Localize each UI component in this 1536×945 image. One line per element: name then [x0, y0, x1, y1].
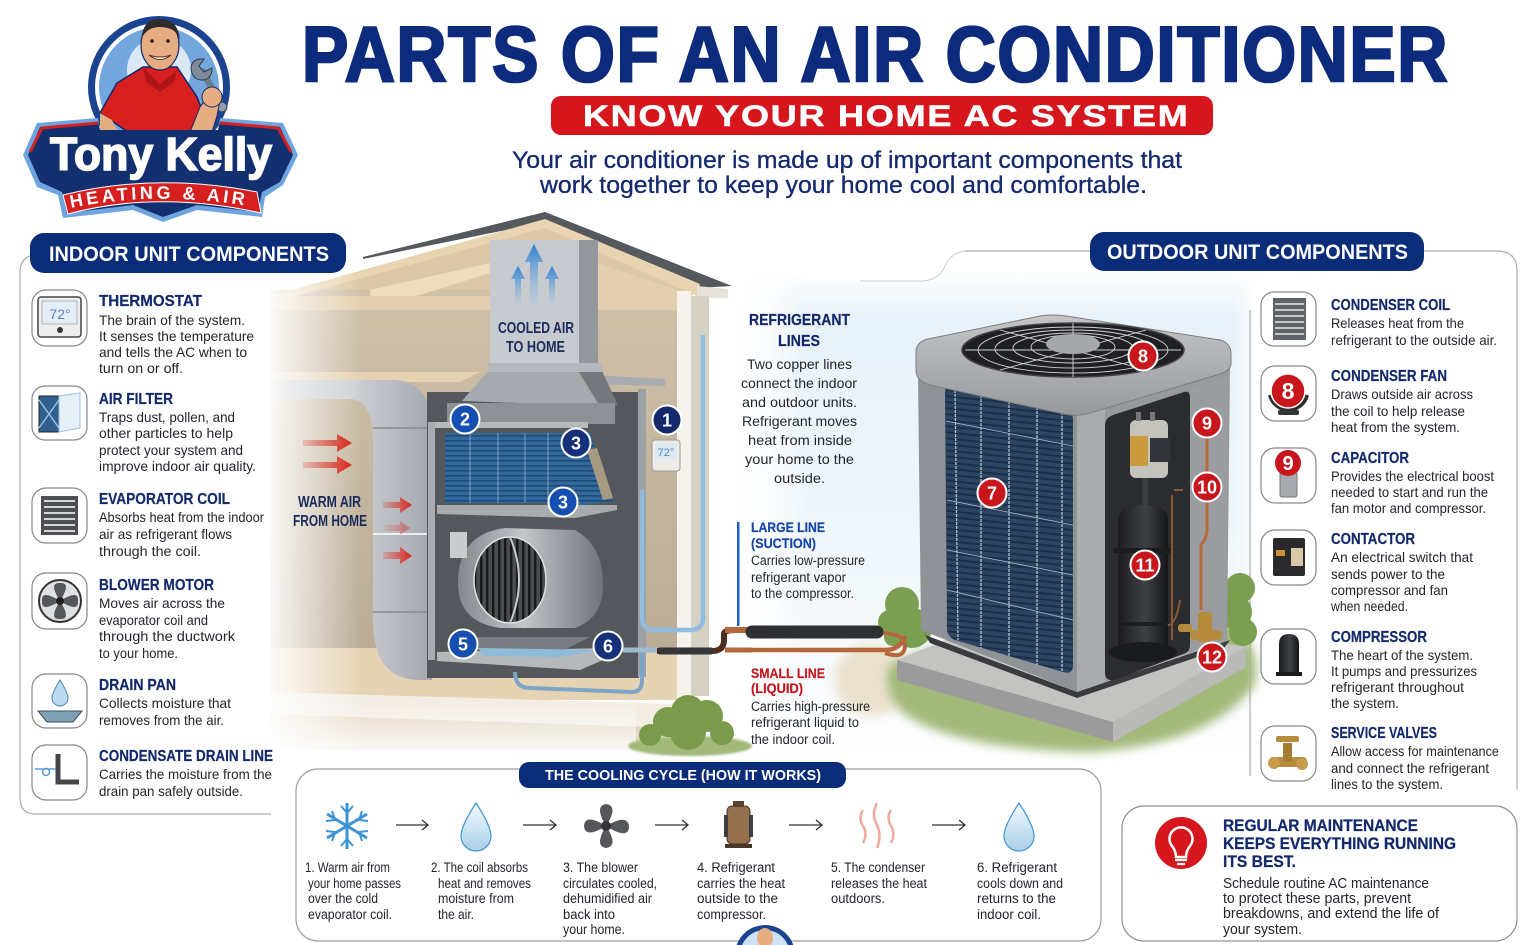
icon: air filter	[32, 386, 87, 440]
step 6: 6. Refrigerant	[977, 860, 1057, 875]
blower housing	[458, 528, 603, 628]
step 2	[431, 860, 531, 922]
outdoor ground and shrubs	[628, 573, 1257, 756]
item: condenser coil	[1261, 292, 1497, 348]
step 1: 1. Warm air from	[305, 860, 390, 875]
evaporator coil	[445, 433, 563, 503]
item: capacitor: Provides the electrical boost	[1331, 468, 1494, 484]
house cutaway illustration: 72°	[658, 447, 674, 459]
refrigerant lines	[657, 630, 905, 655]
condenser coil panel	[945, 385, 1073, 673]
item: compressor: refrigerant throughout	[1331, 679, 1464, 695]
step 4	[697, 860, 785, 922]
item: condenser fan: the coil to help release	[1331, 403, 1465, 419]
logo: Tony Kelly Heating & Air	[23, 16, 298, 222]
item: contactor: sends power to the	[1331, 566, 1445, 582]
text: small line liquid	[751, 665, 870, 747]
panel: regular maintenance	[1122, 806, 1517, 941]
item: thermostat: It senses the temperature	[99, 328, 254, 344]
step 1: over the cold	[308, 891, 378, 906]
base feet	[925, 635, 1230, 698]
step 2: moisture from	[438, 891, 514, 906]
maintenance body	[1223, 876, 1440, 938]
item: condenser fan: CONDENSER FAN	[1331, 368, 1447, 385]
heading: outdoor unit components	[1090, 232, 1424, 271]
corner post	[1077, 401, 1105, 692]
number badges: outdoor: 11	[1135, 556, 1155, 576]
text: large line suction: to the compressor.	[751, 586, 854, 601]
item: thermostat: The brain of the system.	[99, 312, 245, 328]
item: compressor: It pumps and pressurizes	[1331, 663, 1477, 679]
text: refrigerant lines: LINES	[778, 333, 820, 350]
background sky behind outdoor unit	[735, 251, 1257, 758]
icon: heat waves	[860, 803, 894, 848]
step 4: outside to the	[697, 891, 778, 906]
panel: cooling cycle	[296, 762, 1101, 945]
item: service valves: lines to the system.	[1331, 776, 1443, 792]
item: condenser coil: Releases heat from the	[1331, 315, 1464, 331]
maintenance heading: KEEPS EVERYTHING RUNNING	[1223, 834, 1456, 853]
step 2: the air.	[438, 907, 474, 922]
item: drain pan: Collects moisture that	[99, 695, 231, 711]
wall pillars	[677, 291, 691, 696]
item: condenser coil: refrigerant to the outside air.	[1331, 332, 1497, 348]
item: evaporator coil: Absorbs heat from the indoor	[99, 509, 264, 525]
condensate pipes	[642, 335, 703, 630]
contactor and capacitor	[1130, 412, 1170, 508]
item: contactor	[1261, 530, 1473, 614]
item: air filter: AIR FILTER	[99, 391, 173, 408]
thermostat on wall	[652, 440, 680, 471]
icon: capacitor badge	[1261, 448, 1316, 503]
logo wrench	[203, 72, 222, 107]
text: refrigerant lines: REFRIGERANT	[749, 312, 850, 329]
step 4: carries the heat	[697, 876, 785, 891]
item: condenser fan: Draws outside air across	[1331, 386, 1473, 402]
item: condenser fan	[1261, 366, 1473, 435]
item: thermostat: and tells the AC when to	[99, 344, 247, 360]
intro text: work together to keep your home cool and comfortable.	[539, 172, 1147, 199]
item: compressor: The heart of the system.	[1331, 647, 1473, 663]
label: warm air from home: FROM HOME	[293, 513, 367, 530]
item: drain pan: DRAIN PAN	[99, 677, 176, 694]
item: air filter: protect your system and	[99, 442, 243, 458]
item: evaporator coil: through the coil.	[99, 543, 201, 559]
floor	[270, 648, 677, 700]
item: compressor: COMPRESSOR	[1331, 629, 1427, 646]
number badges: indoor: 6	[603, 636, 613, 656]
text: refrigerant lines: your home to the	[745, 451, 854, 467]
text: small line liquid: the indoor coil.	[751, 732, 835, 747]
intro text	[512, 147, 1182, 199]
intro text: Your air conditioner is made up of important components that	[512, 147, 1182, 174]
warm air red arrows	[303, 434, 412, 564]
maintenance body: breakdowns, and extend the life of	[1223, 906, 1440, 922]
text: small line liquid: refrigerant liquid to	[751, 715, 859, 730]
panel: indoor unit outline	[20, 255, 271, 814]
text: large line suction: refrigerant vapor	[751, 570, 846, 585]
copper tubing inside	[1168, 490, 1183, 640]
text: refrigerant lines: heat from inside	[748, 432, 852, 448]
roof shingles	[363, 212, 732, 288]
item: blower motor: through the ductwork	[99, 628, 236, 644]
item: contactor: when needed.	[1330, 598, 1408, 614]
icon: coil	[32, 488, 87, 543]
step 5: 5. The condenser	[831, 860, 925, 875]
panel: outdoor unit outline	[965, 251, 1517, 790]
item: air filter: Traps dust, pollen, and	[99, 409, 235, 425]
shrub beside unit right	[1218, 573, 1257, 646]
cabinet back	[427, 392, 639, 678]
heading: indoor unit components	[30, 233, 346, 273]
icon: water drop	[461, 803, 491, 851]
line marker: large line bar	[737, 522, 740, 626]
left fade overlay	[262, 275, 362, 760]
item: evaporator coil	[32, 488, 264, 559]
item: condenser fan: heat from the system.	[1331, 419, 1460, 435]
step 5	[831, 860, 927, 906]
icon: water drop	[1004, 803, 1034, 851]
ceiling ledge	[270, 372, 480, 382]
step 5: outdoors.	[831, 891, 885, 906]
maintenance body: your system.	[1223, 922, 1302, 938]
step 1	[305, 860, 401, 922]
concrete slab	[897, 660, 1113, 742]
text: small line liquid: Carries high-pressure	[751, 699, 870, 714]
maintenance heading	[1223, 816, 1456, 871]
icon: thermostat: 72°	[49, 306, 71, 322]
mini logo mascot	[735, 925, 795, 945]
service valves	[1178, 612, 1222, 642]
number badges: indoor: 3	[558, 492, 568, 512]
item: blower motor	[32, 573, 236, 661]
text: refrigerant lines: Two copper lines	[747, 356, 852, 372]
item: air filter: improve indoor air quality.	[99, 458, 256, 474]
item: drain pan	[32, 674, 231, 728]
outdoor AC condenser unit	[897, 315, 1246, 742]
coil shelf	[437, 505, 617, 518]
text: refrigerant lines: connect the indoor	[741, 375, 857, 391]
item: compressor	[1261, 629, 1477, 711]
item: thermostat: THERMOSTAT	[99, 293, 203, 310]
label: cooled air to home	[498, 320, 574, 356]
step 3	[563, 860, 657, 937]
logo badge shield	[23, 118, 298, 222]
step 3: dehumidified air	[563, 891, 652, 906]
item: contactor: An electrical switch that	[1331, 549, 1473, 565]
number badges: indoor: 1	[662, 410, 672, 430]
number badges: outdoor: 10	[1197, 478, 1217, 498]
step 3: 3. The blower	[563, 860, 638, 875]
number badges: indoor: 3	[571, 434, 581, 454]
subtitle banner: KNOW YOUR HOME AC SYSTEM	[583, 100, 1188, 133]
interior wall	[270, 290, 678, 660]
left face	[918, 375, 1077, 692]
label: cooled air to home: COOLED AIR	[498, 320, 574, 337]
step 3: your home.	[563, 922, 625, 937]
step 2: heat and removes	[438, 876, 531, 891]
item: thermostat: turn on or off.	[99, 360, 183, 376]
service opening	[1105, 392, 1190, 680]
step 6: indoor coil.	[977, 907, 1041, 922]
maintenance body: to protect these parts, prevent	[1223, 891, 1411, 907]
cabinet frame	[428, 422, 588, 428]
right panel strip with copper line	[1190, 376, 1228, 652]
icon: capacitor badge: 9	[1282, 453, 1294, 475]
text: refrigerant lines: Refrigerant moves	[742, 413, 857, 429]
item: service valves	[1261, 725, 1499, 792]
label: warm air from home	[293, 494, 367, 530]
step 5: releases the heat	[831, 876, 927, 891]
item: air filter	[32, 386, 256, 474]
icon: thermostat	[32, 290, 87, 346]
item: capacitor	[1261, 448, 1494, 516]
top lid	[916, 315, 1231, 415]
item: capacitor: needed to start and run the	[1331, 484, 1488, 500]
item: compressor: the system.	[1331, 695, 1399, 711]
item: blower motor: BLOWER MOTOR	[99, 577, 214, 594]
icon: fan	[32, 573, 87, 629]
text: small line liquid: SMALL LINE	[751, 665, 825, 681]
item: thermostat	[32, 290, 254, 376]
cooling cycle heading	[519, 762, 846, 788]
label: cooled air to home: TO HOME	[506, 339, 565, 356]
logo tagline: HEATING & AIR	[70, 186, 244, 208]
item: service valves: SERVICE VALVES	[1331, 725, 1437, 742]
item: contactor: CONTACTOR	[1331, 531, 1415, 548]
number badges: indoor	[448, 404, 682, 660]
step 4: compressor.	[697, 907, 766, 922]
logo ribbon	[63, 183, 261, 214]
step 3: circulates cooled,	[563, 876, 657, 891]
step 6	[977, 860, 1063, 922]
icon: condenser coil	[1261, 292, 1316, 346]
number badges: outdoor	[978, 342, 1226, 672]
item: condenser coil: CONDENSER COIL	[1331, 297, 1450, 314]
item: blower motor: to your home.	[99, 645, 178, 661]
icon: light bulb	[1155, 817, 1207, 869]
item: blower motor: Moves air across the	[99, 595, 225, 611]
heading: outdoor unit components: OUTDOOR UNIT COMPONENTS	[1107, 241, 1408, 264]
maintenance heading: ITS BEST.	[1223, 852, 1296, 871]
text: refrigerant lines	[741, 312, 857, 486]
maintenance heading: REGULAR MAINTENANCE	[1223, 816, 1418, 835]
step 2: 2. The coil absorbs	[431, 860, 528, 875]
compressor	[1109, 505, 1177, 662]
icon: drain pan	[32, 674, 87, 728]
number badges: outdoor: 9	[1202, 414, 1212, 434]
logo man	[100, 19, 227, 132]
right face	[1077, 368, 1230, 692]
item: evaporator coil: EVAPORATOR COIL	[99, 491, 230, 508]
label: cooled air arrows	[511, 244, 559, 305]
return duct	[270, 380, 432, 680]
fan grille	[962, 323, 1184, 377]
icon: snowflake	[326, 803, 368, 849]
icon: valve	[1261, 726, 1316, 781]
drain pan	[437, 648, 605, 670]
step 1: evaporator coil.	[308, 907, 392, 922]
supply plenum	[462, 371, 600, 406]
item: air filter: other particles to help	[99, 425, 233, 441]
item: blower motor: evaporator coil and	[99, 612, 208, 628]
item: condensate drain line: CONDENSATE DRAIN LINE	[99, 748, 273, 765]
supply duct	[490, 240, 579, 365]
text: refrigerant lines: outside.	[774, 470, 825, 486]
item: capacitor: fan motor and compressor.	[1331, 500, 1486, 516]
item: condensate drain line	[32, 745, 273, 800]
cooling cycle heading: THE COOLING CYCLE (HOW IT WORKS)	[545, 767, 821, 784]
attic wood	[270, 226, 697, 310]
label: warm air from home: WARM AIR	[298, 494, 361, 511]
heading: indoor unit components: INDOOR UNIT COMPONENTS	[49, 243, 329, 266]
number badges: outdoor: 12	[1202, 648, 1222, 668]
icon: compressor	[1261, 629, 1316, 684]
house cutaway illustration	[262, 212, 732, 760]
maintenance body: Schedule routine AC maintenance	[1223, 876, 1429, 892]
step 3: back into	[563, 907, 615, 922]
number badges: outdoor: 8	[1138, 346, 1148, 366]
title: PARTS OF AN AIR CONDITIONER	[302, 10, 1447, 98]
arrows between steps	[396, 820, 965, 830]
text: refrigerant lines: and outdoor units.	[742, 394, 857, 410]
item: contactor: compressor and fan	[1331, 582, 1448, 598]
step 4: 4. Refrigerant	[697, 860, 775, 875]
item: condensate drain line: drain pan safely outside.	[99, 783, 243, 799]
step 6: cools down and	[977, 876, 1063, 891]
icon: fan badge: 8	[1282, 378, 1295, 404]
text: small line liquid: (LIQUID)	[751, 680, 803, 696]
step 1: your home passes	[308, 876, 401, 891]
number badges: indoor: 5	[458, 634, 468, 654]
item: condensate drain line: Carries the moisture from the	[99, 766, 272, 782]
item: service valves: and connect the refrigerant	[1331, 760, 1489, 776]
text: large line suction: LARGE LINE	[751, 519, 825, 535]
step 6: returns to the	[977, 891, 1056, 906]
icon: fan badge	[1261, 366, 1316, 421]
item: service valves: Allow access for maintenance	[1331, 743, 1499, 759]
logo wordmark: Tony Kelly	[50, 128, 272, 180]
number badges: indoor: 2	[460, 410, 470, 430]
icon: contactor	[1261, 530, 1316, 585]
item: capacitor: CAPACITOR	[1331, 450, 1409, 467]
indoor side shrub	[628, 695, 752, 756]
item: drain pan: removes from the air.	[99, 712, 224, 728]
icon: blower fan	[584, 804, 629, 848]
text: large line suction: (SUCTION)	[751, 535, 816, 551]
text: large line suction: Carries low-pressure	[751, 553, 865, 568]
icon: compressor	[724, 801, 753, 848]
text: large line suction	[751, 519, 865, 601]
roof fascia	[270, 219, 700, 303]
number badges: outdoor: 7	[987, 484, 997, 504]
icon: drain pipe	[32, 745, 87, 800]
item: evaporator coil: air as refrigerant flows	[99, 526, 232, 542]
shrub beside unit left	[878, 587, 932, 648]
